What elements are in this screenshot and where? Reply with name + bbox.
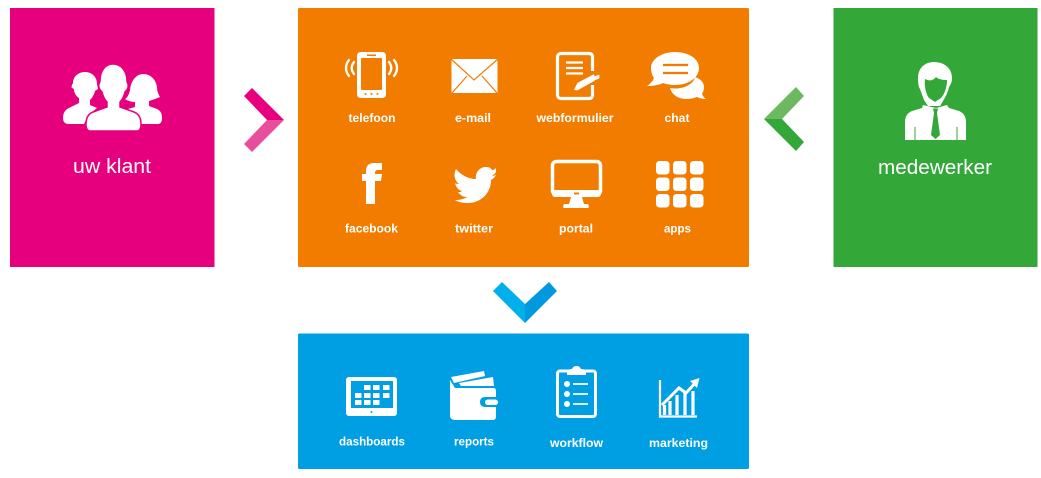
label: twitter: twitter (455, 222, 493, 236)
icon: telefoon (346, 52, 397, 98)
icon: marketing chart (660, 378, 700, 416)
label: dashboards: dashboards (339, 434, 405, 448)
icon: dashboards (346, 377, 397, 416)
icon: facebook (362, 163, 382, 204)
icon: group of people (63, 64, 162, 131)
icon: twitter (455, 167, 496, 203)
icon: workflow clipboard (558, 366, 596, 416)
label: apps: apps (664, 222, 691, 236)
arrow: pink chevron (244, 88, 284, 152)
icon: portal (552, 162, 601, 208)
panel: outputs (298, 334, 749, 469)
icon: e-mail (451, 59, 498, 93)
panel: medewerker (834, 8, 1038, 267)
label: facebook: facebook (345, 222, 398, 236)
label: chat: chat (664, 111, 690, 125)
arrow: green chevron (764, 87, 804, 151)
icon: chat (647, 52, 706, 99)
label: telefoon: telefoon (348, 111, 396, 125)
arrow: blue chevron (493, 282, 557, 323)
label: e-mail: e-mail (455, 111, 491, 125)
label: webformulier: webformulier (535, 111, 614, 125)
icon: apps (656, 161, 704, 208)
icon: webformulier (558, 54, 600, 98)
label: portal: portal (559, 222, 593, 236)
label: reports: reports (454, 434, 494, 448)
icon: employee (905, 62, 966, 140)
icon: reports wallet (450, 371, 498, 420)
label: workflow: workflow (549, 436, 604, 450)
label: marketing: marketing (649, 436, 708, 450)
label: medewerker: medewerker (878, 157, 992, 179)
panel: channels (298, 8, 749, 267)
panel: uw klant (10, 8, 214, 267)
label: uw klant: uw klant (73, 156, 151, 178)
